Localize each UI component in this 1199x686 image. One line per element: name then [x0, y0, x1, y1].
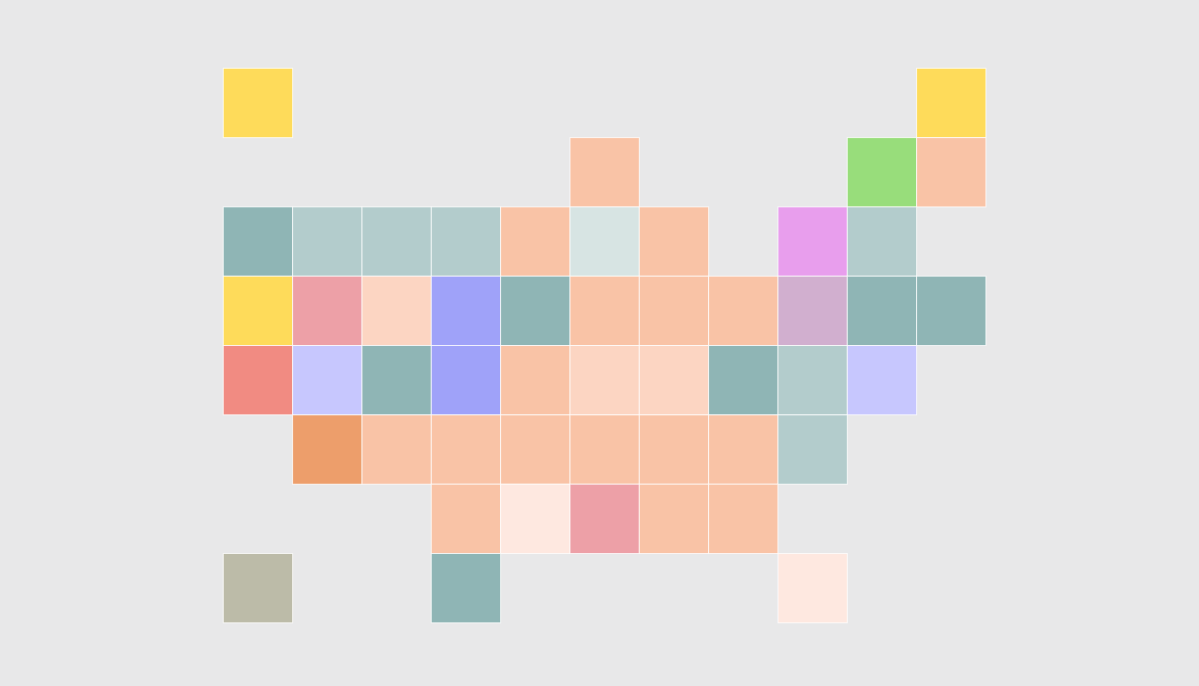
row 6 tiles: [293, 415, 847, 484]
row 3 tiles: [223, 207, 917, 276]
row 5 tiles: [223, 346, 917, 415]
row 4 tiles: [223, 276, 986, 346]
row 1 tiles: [223, 68, 986, 138]
row 7 tiles: [431, 484, 778, 554]
row 2 tiles: [570, 138, 986, 207]
row 8 tiles: [223, 554, 847, 623]
